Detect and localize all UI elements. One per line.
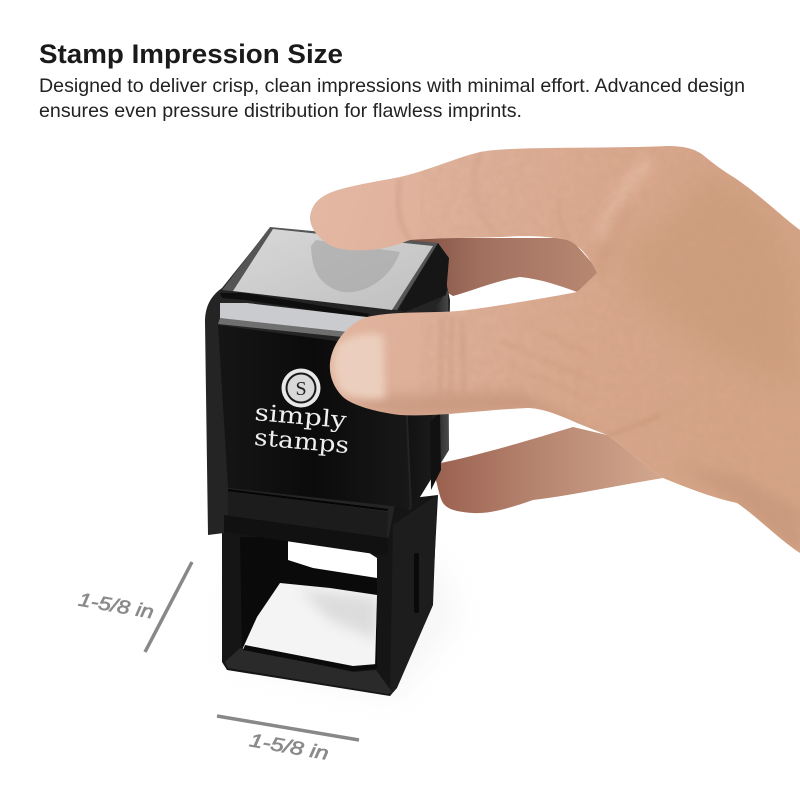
thumb nail xyxy=(333,334,385,399)
cap right dark side xyxy=(398,243,449,312)
skin shading xyxy=(333,146,800,556)
lower frame xyxy=(222,495,438,696)
window strip xyxy=(220,293,370,318)
dimension: depth measure xyxy=(77,562,192,652)
white view through the back xyxy=(288,538,377,578)
width label: 1-5/8 in xyxy=(248,730,330,765)
body front panel xyxy=(218,325,410,508)
rear window opening xyxy=(240,537,377,670)
white paper on the floor xyxy=(242,583,377,670)
logo wordmark: simply xyxy=(254,400,348,434)
description text xyxy=(39,75,745,122)
thumb knuckle creases xyxy=(440,318,464,395)
right side of frame xyxy=(390,495,437,696)
upper body xyxy=(205,228,450,540)
logo wordmark: stamps xyxy=(253,425,350,459)
hand xyxy=(310,146,800,556)
depth label: 1-5/8 in xyxy=(77,590,155,624)
side slot xyxy=(414,553,419,613)
ground shadow xyxy=(225,560,460,700)
ring finger behind stamp xyxy=(430,427,663,513)
depth line xyxy=(145,562,192,652)
top cap, clear cover xyxy=(222,227,438,310)
skin texture xyxy=(420,146,800,556)
top cap, grey label xyxy=(233,229,433,310)
title: Stamp Impression Size xyxy=(39,39,343,69)
icon: seal logo: S xyxy=(295,378,307,400)
middle finger behind stamp xyxy=(400,238,600,296)
stamp xyxy=(205,227,450,696)
dimension: width measure xyxy=(217,716,359,765)
mechanism slot xyxy=(228,490,388,540)
grey strip under the cap xyxy=(220,303,367,333)
width line xyxy=(217,716,359,740)
body right side xyxy=(405,290,449,510)
description text: Designed to deliver crisp, clean impressions with minimal effort. Advanced design xyxy=(39,75,745,97)
icon: seal logo xyxy=(282,368,320,408)
description text: ensures even pressure distribution for flawless imprints. xyxy=(39,100,522,122)
logo wordmark xyxy=(253,400,350,459)
bottom rim highlight xyxy=(225,648,392,694)
